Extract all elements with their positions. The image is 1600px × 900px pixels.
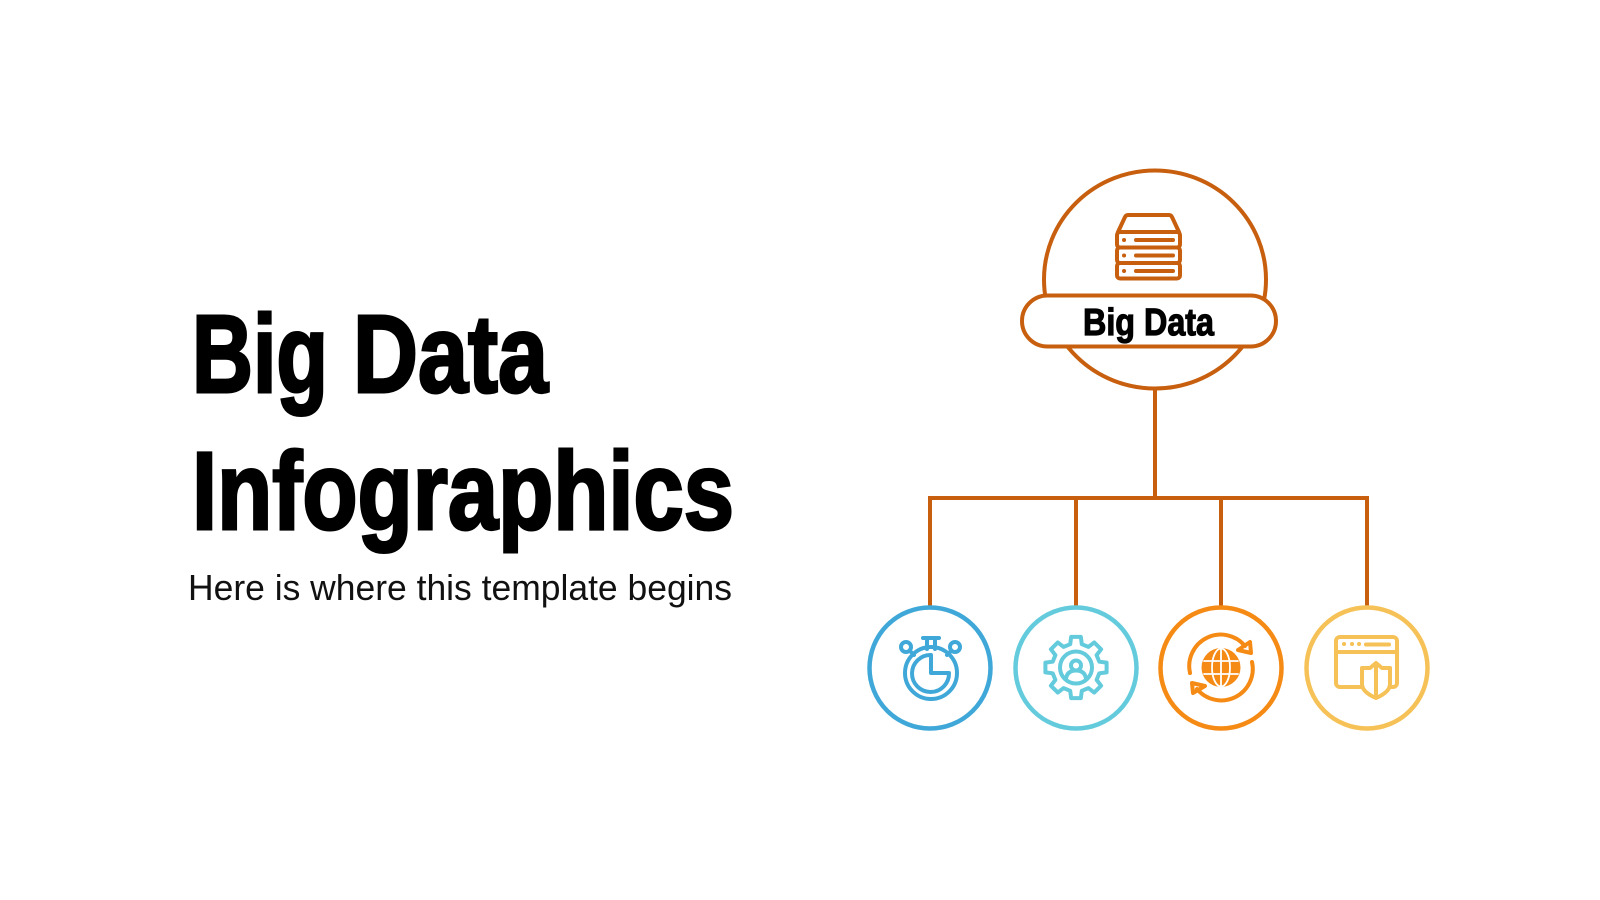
node: gear user: [1016, 608, 1136, 728]
label pill: [1022, 296, 1276, 346]
node: globe sync: [1160, 608, 1282, 728]
icon: stopwatch: [901, 638, 960, 699]
label text: Big Data: [1083, 302, 1215, 344]
title: Big: [192, 293, 328, 416]
main circle: [1044, 170, 1266, 388]
ring: [1016, 608, 1136, 728]
node: browser shield: [1306, 608, 1428, 728]
ring: [1306, 608, 1428, 728]
connector lines: [930, 386, 1367, 608]
node: stopwatch: [870, 608, 990, 728]
title: [192, 293, 734, 553]
title: Data: [353, 293, 549, 416]
icon: globe with arrows: [1189, 635, 1253, 700]
icon: server stack: [1117, 215, 1180, 278]
title: Infographics: [192, 430, 734, 553]
main node: big data: [1022, 170, 1276, 388]
icon: gear with user: [1045, 637, 1107, 698]
subtitle: Here is where this template begins: [188, 567, 732, 608]
ring: [870, 608, 990, 728]
ring: [1160, 608, 1282, 728]
icon: browser window with shield: [1336, 637, 1397, 698]
